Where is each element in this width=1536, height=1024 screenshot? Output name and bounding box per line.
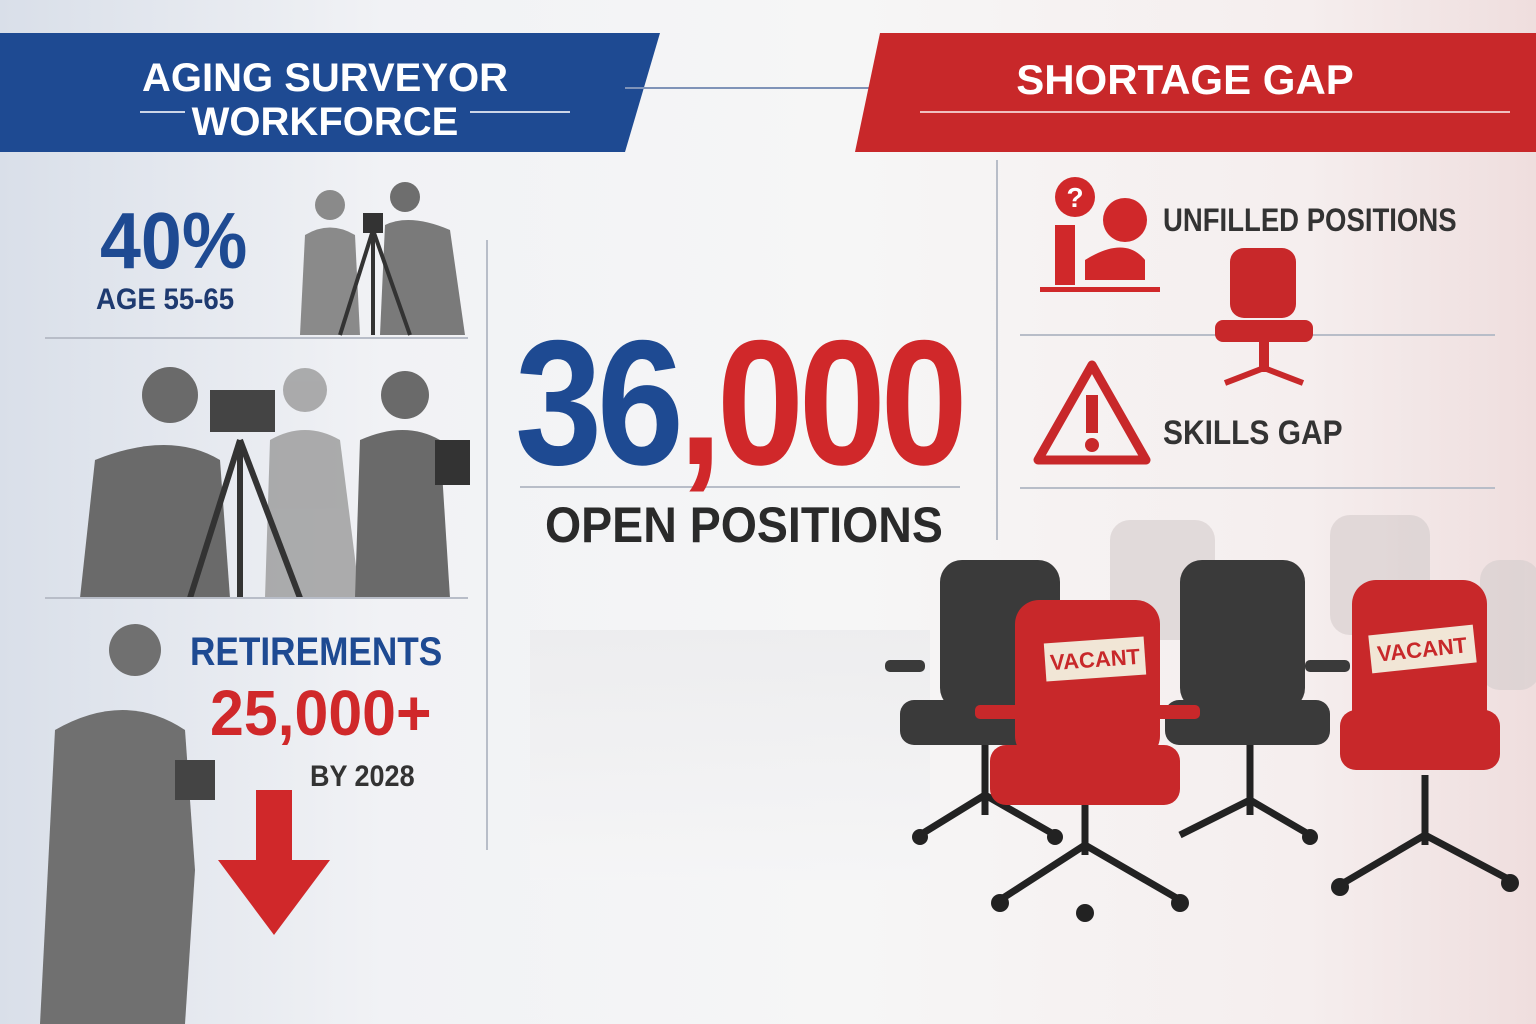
- icon: unfilled position person: [1040, 177, 1160, 292]
- stat: retirements 25,000+ by 2028: RETIREMENTS: [190, 630, 442, 674]
- label: unfilled positions: UNFILLED POSITIONS: [1163, 202, 1457, 238]
- stat: retirements 25,000+ by 2028: BY 2028: [310, 760, 415, 793]
- icon: unfilled position person: ?: [1066, 182, 1084, 213]
- label: skills gap: SKILLS GAP: [1163, 414, 1343, 452]
- icon: red chair: [1215, 248, 1313, 386]
- banner: aging surveyor workforce: [0, 33, 1536, 152]
- banner: aging surveyor workforce: WORKFORCE: [192, 100, 458, 144]
- illustration: surveyors with tripod: [300, 182, 465, 336]
- arrow: down: [218, 790, 330, 935]
- stat: retirements 25,000+ by 2028: 25,000+: [210, 677, 431, 749]
- floor: faint platform: [530, 630, 930, 880]
- banner: aging surveyor workforce: AGING SURVEYOR: [142, 56, 508, 100]
- icon: warning triangle: [1034, 360, 1150, 464]
- banner: aging surveyor workforce: SHORTAGE GAP: [1016, 56, 1354, 103]
- illustration: vacant chairs: [885, 515, 1536, 922]
- stat: 40% age 55-65: 40%: [100, 196, 247, 285]
- headline stat: 36,000 open positions: 36,000: [515, 303, 962, 502]
- headline stat: 36,000 open positions: OPEN POSITIONS: [545, 497, 943, 553]
- illustration: vacant chairs: VACANT: [1049, 644, 1141, 675]
- stat: 40% age 55-65: AGE 55-65: [96, 283, 234, 316]
- illustration: vacant chairs: VACANT: [1376, 632, 1469, 667]
- illustration: retiring surveyor: [40, 624, 215, 1024]
- illustration: survey team: [80, 367, 470, 597]
- stat: retirements 25,000+ by 2028: [190, 630, 442, 793]
